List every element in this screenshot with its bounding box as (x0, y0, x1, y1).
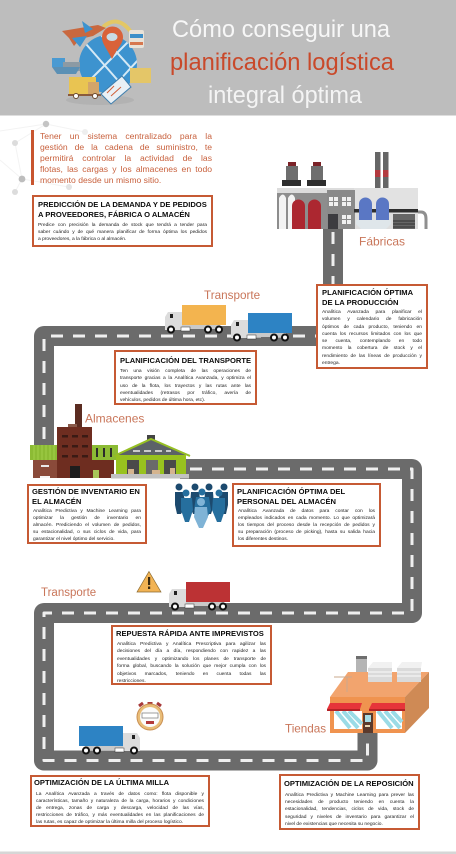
panel: gestión de inventario: almacén. Prediciendo el volumen de pedidos, (33, 523, 141, 528)
panel: planificación de la producción: entrega. (322, 361, 340, 366)
panel: respuesta rápida (111, 625, 272, 685)
panel: planificación de la producción: cuenta los recursos limitados con los que (322, 332, 422, 337)
panel: personal del almacén: su preparación (proceso de picking), hasta su salida hacia (238, 530, 375, 535)
panel: reposición: Analítica Predictiva y Machine Learning para prever las (285, 793, 414, 798)
panel: respuesta rápida: forma global, buscando la solución que mejor cumpla con los (117, 664, 266, 669)
panel: planificación de la producción (316, 284, 428, 369)
panel: gestión de inventario: GESTIÓN DE INVENTARIO EN (32, 487, 140, 496)
panel: personal del almacén: los tiempos del proceso desde la recepción de pedidos y (238, 523, 375, 528)
panel: planificación de la producción: óptimos de cada producto, teniendo en (322, 325, 422, 330)
icon: staff group (175, 484, 228, 528)
label: Fábricas: Fábricas (359, 234, 405, 248)
panel: planificación del transporte: PLANIFICACIÓN DEL TRANSPORTE (120, 356, 251, 365)
panel: planificación de la producción: DE LA PRODUCCIÓN (322, 298, 399, 306)
icon: stopwatch (137, 702, 163, 730)
panel: última milla: OPTIMIZACIÓN DE LA ÚLTIMA MILLA (34, 778, 169, 787)
panel: planificación de la producción: momento la cobertura de stock y el (322, 346, 422, 351)
panel: gestión de inventario: garantizar el nivel óptimo del servicio. (33, 537, 115, 542)
panel: personal del almacén: los diferentes destinos. (238, 537, 288, 542)
panel: reposición: seguridad y niveles de inventario para garantizar el (285, 815, 414, 820)
panel: planificación del transporte: eventualidades (retrasos por tráfico, avería de (120, 391, 251, 396)
intro text: permitirá controlar la actividad de las (40, 153, 212, 163)
panel: reposición: necesidades de producto teniendo en cuenta la (285, 800, 414, 805)
panel: predicción de la demanda: PREDICCIÓN DE LA DEMANDA Y DE PEDIDOS (38, 200, 207, 209)
panel: personal del almacén (232, 483, 381, 547)
panel: respuesta rápida: REPUESTA RÁPIDA ANTE IMPREVISTOS (116, 629, 264, 638)
icon: warning triangle (137, 572, 161, 592)
panel: respuesta rápida: eventualidades y optimizando los planes de transporte de (117, 657, 266, 662)
panel: gestión de inventario: optimizar la gestión de inventario en (33, 516, 141, 521)
panel: predicción de la demanda: saber cuándo y de qué manera planificar de forma óptima los pedidos (38, 230, 207, 235)
panel: respuesta rápida: Analítica Predictiva y Analítica Prescriptiva para agilizar las (117, 642, 266, 647)
label: Transporte upper: Transporte (204, 289, 260, 302)
panel: última milla: de entrega, zonas de carga y descarga, velocidad de las vías, (36, 806, 204, 811)
panel: planificación de la producción: PLANIFICACIÓN ÓPTIMA (322, 288, 413, 297)
title: Cómo conseguir una (172, 16, 390, 43)
panel: personal del almacén: PLANIFICACIÓN ÓPTIMA DEL (237, 487, 345, 496)
panel: planificación de la producción: volumen y calendario de fabricación (322, 317, 422, 322)
panel: personal del almacén: Analítica Avanzada de datos para contar con los (238, 509, 375, 514)
panel: planificación del transporte: uso de la flota, los trayectos y las rutas ante las (120, 384, 251, 389)
truck: blue lower (79, 726, 140, 754)
panel: planificación de la producción: rendimiento de las líneas de producción y (322, 354, 422, 359)
panel: planificación del transporte: vehículos, pedidos de última hora, etc). (120, 398, 205, 403)
panel: reposición: OPTIMIZACIÓN DE LA REPOSICIÓN (284, 779, 414, 788)
panel: última milla: características, tamaño y naturaleza de la carga, horarios y condiciones (36, 799, 204, 804)
panel: personal del almacén: empleados indicados en cada momento. Lo que optimizará (238, 516, 375, 521)
panel: respuesta rápida: objetivos marcados, teniendo en cuenta todas las (117, 672, 266, 677)
label: Almacenes: Almacenes (85, 412, 144, 426)
panel: planificación del transporte: Ten una visión completa de las operaciones de (120, 369, 251, 374)
panel: reposición (279, 774, 420, 830)
panel: planificación del transporte (114, 350, 257, 405)
truck: blue upper (231, 313, 292, 340)
label: Transporte lower: Transporte (41, 587, 96, 599)
title: integral óptima (208, 82, 362, 109)
label: Tiendas: Tiendas (285, 722, 326, 736)
title (170, 16, 394, 109)
truck: red (169, 582, 230, 610)
panel: última milla (30, 775, 210, 827)
panel: gestión de inventario: Analítica Predictiva y Machine Learning para (33, 509, 141, 514)
truck: yellow (165, 305, 226, 332)
panel: personal del almacén: PERSONAL DEL ALMACÉN (237, 496, 336, 506)
panel: reposición: estacionalidad, tendencias, ciclos de vida, stock de (285, 807, 414, 812)
title: planificación logística (170, 49, 394, 76)
illustration: logistics globe (52, 21, 151, 105)
panel: última milla: La Analítica Avanzada a través de datos como: flota disponible y (36, 792, 204, 797)
panel: predicción de la demanda: Predice con precisión la demanda de stock que tendrá a tender para (38, 223, 207, 228)
icon: warehouse buildings (30, 404, 190, 478)
panel: planificación de la producción: Analítica Avanzada para planificar el (322, 310, 422, 315)
panel: gestión de inventario (27, 484, 147, 544)
panel: planificación de la producción: se cuenta, contemplando en todo (322, 339, 422, 344)
road (44, 225, 412, 760)
panel: predicción de la demanda: a proveedores, a la fábrica o al almacén. (38, 237, 126, 242)
icon: factory (277, 152, 426, 229)
panel: reposición: nivel de existencias que necesita su negocio. (285, 822, 383, 827)
panel: predicción de la demanda: A PROVEEDORES, FÁBRICA O ALMACÉN (38, 210, 190, 218)
panel: gestión de inventario: su estacionalidad, o sus ciclos de vida, para (33, 530, 141, 535)
intro text (40, 131, 212, 185)
header band (0, 0, 456, 116)
intro text: gestión de la cadena de suministro, te (40, 142, 212, 152)
icon: store (327, 656, 429, 733)
panel: última milla: las rutas, es capaz de optimizar la última milla del proceso logístico. (36, 820, 183, 825)
panel: respuesta rápida: decisiones del día a día, respondiendo con rapidez a las (117, 649, 266, 654)
panel: gestión de inventario: EL ALMACÉN (32, 496, 81, 506)
panel: respuesta rápida: restricciones. (117, 679, 146, 684)
panel: planificación del transporte: transporte gracias a la Analítica Avanzada, y optimiza el (120, 376, 251, 381)
intro text: Tener un sistema centralizado para la (40, 131, 212, 141)
accent bar (31, 130, 34, 185)
panel: predicción de la demanda (32, 195, 213, 247)
panel: última milla: restricciones de tráfico, y más eventualidades en las planificaciones de (36, 813, 204, 818)
intro text: flotas, las cargas y los almacenes en todo (40, 164, 212, 174)
intro text: momento desde un mismo sitio. (40, 175, 161, 185)
